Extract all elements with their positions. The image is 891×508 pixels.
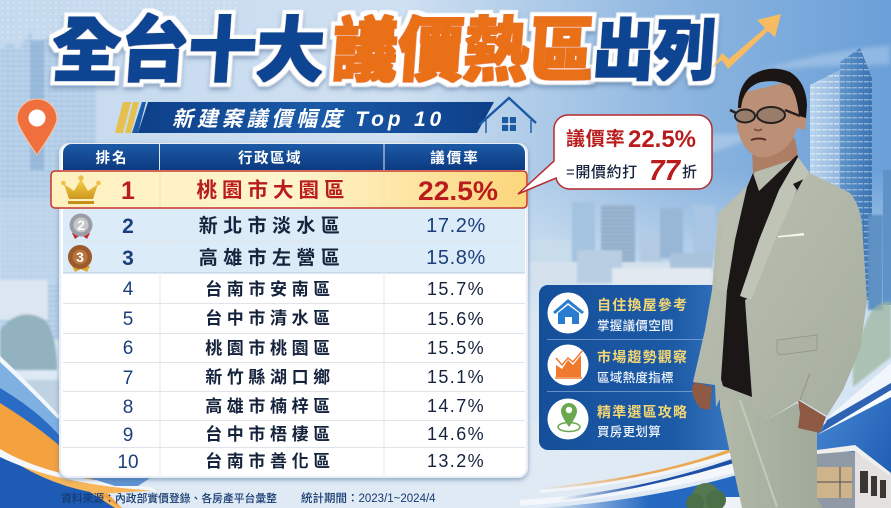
- title: 全台十大議價熱區出列: 出列: [591, 15, 718, 89]
- right arm seam: [800, 373, 810, 400]
- row 6: 6: [123, 338, 133, 359]
- callout: 議價率 22.5%: [518, 115, 712, 194]
- table header: 排名: [96, 149, 128, 167]
- row 8: 高雄市楠梓區: [205, 396, 335, 416]
- icon: map pin: [17, 99, 57, 155]
- title: 全台十大議價熱區出列: [50, 12, 718, 90]
- row 3: 3: [122, 247, 134, 270]
- row 1 highlight: [51, 171, 527, 208]
- item: 精準選區攻略: [548, 398, 688, 440]
- source note: [61, 491, 436, 505]
- item: 自住換屋參考: [548, 292, 688, 334]
- table header: 議價率: [430, 149, 480, 167]
- row 6: [123, 338, 485, 359]
- item: 自住換屋參考: 自住換屋參考: [597, 297, 688, 313]
- subtitle banner: 新建案議價幅度 Top 10: [172, 107, 445, 131]
- icon: house on banner: [479, 98, 536, 133]
- head: [730, 69, 807, 157]
- row 10: 台南市善化區: [205, 451, 335, 471]
- row 6: 15.5%: [427, 338, 485, 358]
- callout: 議價率 22.5%: 77: [649, 155, 682, 187]
- row 3: 15.8%: [426, 247, 486, 269]
- item: 精準選區攻略: 精準選區攻略: [597, 404, 688, 420]
- title: 全台十大議價熱區出列: 議價熱區: [330, 12, 597, 90]
- top 2-3 row backgrounds: [63, 208, 525, 273]
- row 4: 15.7%: [427, 279, 485, 299]
- row 9: 14.6%: [427, 424, 485, 444]
- row 7: 15.1%: [427, 367, 485, 387]
- source note: 統計期間：2023/1~2024/4: [301, 491, 436, 505]
- title: 全台十大議價熱區出列: 全台十大: [50, 12, 327, 90]
- person in grey suit: [692, 69, 867, 508]
- table header: 行政區域: [238, 150, 302, 167]
- table header: [63, 144, 525, 170]
- source note: 資料來源：內政部實價登錄、各房產平台彙整: [61, 491, 277, 505]
- right tower: [810, 48, 891, 310]
- row 5: 台中市清水區: [205, 308, 335, 328]
- row 7: 7: [123, 368, 133, 389]
- row 1 highlight: 1: [121, 177, 135, 205]
- item: 市場趨勢觀察: 市場趨勢觀察: [597, 349, 688, 365]
- bottom swooshes: [0, 302, 891, 508]
- row 8: 14.7%: [427, 396, 485, 416]
- row 4: [123, 279, 485, 300]
- pocket flap: [777, 335, 817, 355]
- row 9: 台中市梧棲區: [205, 424, 335, 444]
- pants: [720, 385, 823, 508]
- row 2: 2: [122, 215, 134, 238]
- row 7: 新竹縣湖口鄉: [205, 367, 335, 387]
- row 4: 台南市安南區: [205, 279, 335, 299]
- mid skyline: [530, 202, 720, 286]
- left hand: [692, 382, 712, 410]
- pocket square: [778, 233, 804, 238]
- item: 自住換屋參考: 掌握議價空間: [597, 318, 674, 333]
- row 3: 3: [76, 249, 84, 265]
- right hand: [798, 400, 826, 433]
- panel: benefits: [539, 285, 745, 450]
- row 10: 13.2%: [427, 451, 485, 471]
- row 2: 17.2%: [426, 215, 486, 237]
- jacket: [693, 158, 867, 420]
- row dividers: [63, 241, 525, 448]
- row 9: [123, 424, 485, 446]
- ranking table: [51, 144, 527, 477]
- row 4: 4: [123, 279, 134, 300]
- row 5: 5: [123, 309, 133, 330]
- table body: [60, 144, 527, 477]
- row 2: 2: [77, 217, 85, 233]
- callout: 議價率 22.5%: 折: [682, 164, 697, 181]
- row 9: 9: [123, 425, 133, 446]
- row 3: [68, 245, 486, 272]
- house and tree at bottom right: [686, 445, 891, 508]
- icon: crown: [61, 175, 101, 204]
- row 1 highlight: 22.5%: [418, 176, 498, 206]
- row 8: [123, 396, 485, 418]
- row 7: [123, 367, 485, 389]
- row 2: [70, 214, 486, 239]
- icon: rising arrow: [712, 14, 781, 69]
- row 8: 8: [123, 397, 133, 418]
- callout: 議價率 22.5%: 議價率: [566, 128, 625, 150]
- item: 市場趨勢觀察: 區域熱度指標: [597, 370, 674, 385]
- row 10: 10: [117, 452, 139, 473]
- row 5: [123, 308, 485, 330]
- row 3: 高雄市左營區: [199, 246, 345, 269]
- neck: [752, 138, 798, 192]
- item: 精準選區攻略: 買房更划算: [597, 424, 661, 439]
- callout: 議價率 22.5%: 22.5%: [628, 126, 696, 153]
- row 1 highlight: 桃園市大園區: [196, 178, 350, 202]
- black shirt: [721, 155, 807, 397]
- row 5: 15.6%: [427, 309, 485, 329]
- item: 市場趨勢觀察: [548, 344, 688, 386]
- lapels: [740, 157, 809, 300]
- subtitle banner: [115, 102, 494, 133]
- row 6: 桃園市桃園區: [205, 338, 335, 358]
- row 2: 新北市淡水區: [199, 214, 345, 237]
- left city buildings: [0, 30, 96, 425]
- row 10: [117, 451, 485, 473]
- callout: 議價率 22.5%: =開價約打: [566, 164, 638, 181]
